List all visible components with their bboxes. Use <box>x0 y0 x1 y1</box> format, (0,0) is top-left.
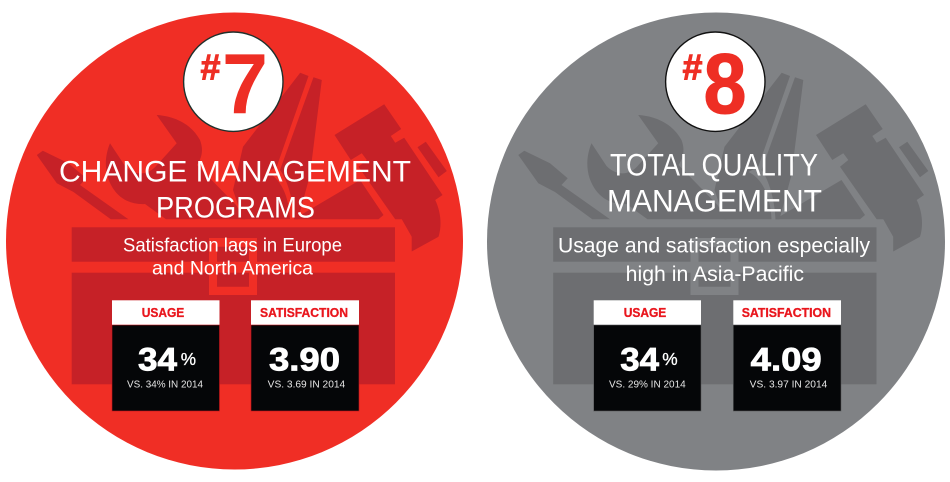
subtitle text: Satisfaction lags in Europe <box>123 235 342 257</box>
stat card: usage: % <box>181 349 196 369</box>
stat card: satisfaction <box>251 300 359 411</box>
heading: TOTAL QUALITY <box>610 147 818 183</box>
stat card: satisfaction: SATISFACTION <box>260 306 348 320</box>
stat card: usage: VS. 29% IN 2014 <box>609 380 686 391</box>
stat card: usage <box>594 300 701 411</box>
heading: CHANGE MANAGEMENT <box>59 156 411 189</box>
heading <box>607 147 822 219</box>
rank badge #8: # <box>682 46 702 88</box>
rank badge #7: # <box>200 46 220 88</box>
stat card: usage <box>112 300 220 411</box>
panel: change management programs <box>6 12 463 470</box>
rank badge #8 <box>666 32 765 132</box>
stat card: usage: USAGE <box>142 306 184 320</box>
stat card: usage: USAGE <box>624 306 666 320</box>
stat card: usage: % <box>662 349 678 369</box>
icon: toolbox with tools <box>37 73 447 384</box>
subtitle text: high in Asia-Pacific <box>626 263 804 286</box>
stat card: satisfaction: VS. 3.69 IN 2014 <box>268 380 346 391</box>
red circle background <box>6 12 463 470</box>
panel: total quality management <box>487 12 945 470</box>
stat card: usage: 34 <box>620 341 659 377</box>
stat card: satisfaction: 3.90 <box>269 341 340 377</box>
rank badge #7: 7 <box>222 37 268 132</box>
heading <box>59 156 411 224</box>
gray circle background <box>487 12 945 470</box>
stat card: satisfaction <box>733 300 841 411</box>
heading: MANAGEMENT <box>607 183 822 219</box>
stat card: usage: VS. 34% IN 2014 <box>127 380 203 391</box>
rank badge #7 <box>184 32 283 132</box>
stat card: usage: 34 <box>138 341 177 377</box>
rank badge #8: 8 <box>704 37 746 132</box>
subtitle text: and North America <box>152 258 313 280</box>
stat card: satisfaction: VS. 3.97 IN 2014 <box>750 380 828 391</box>
stat card: satisfaction: 4.09 <box>751 341 822 377</box>
heading: PROGRAMS <box>156 191 315 224</box>
subtitle text <box>558 235 870 286</box>
subtitle text: Usage and satisfaction especially <box>558 235 870 258</box>
subtitle text <box>123 235 342 280</box>
icon: toolbox with tools <box>518 73 928 384</box>
stat card: satisfaction: SATISFACTION <box>742 306 831 320</box>
